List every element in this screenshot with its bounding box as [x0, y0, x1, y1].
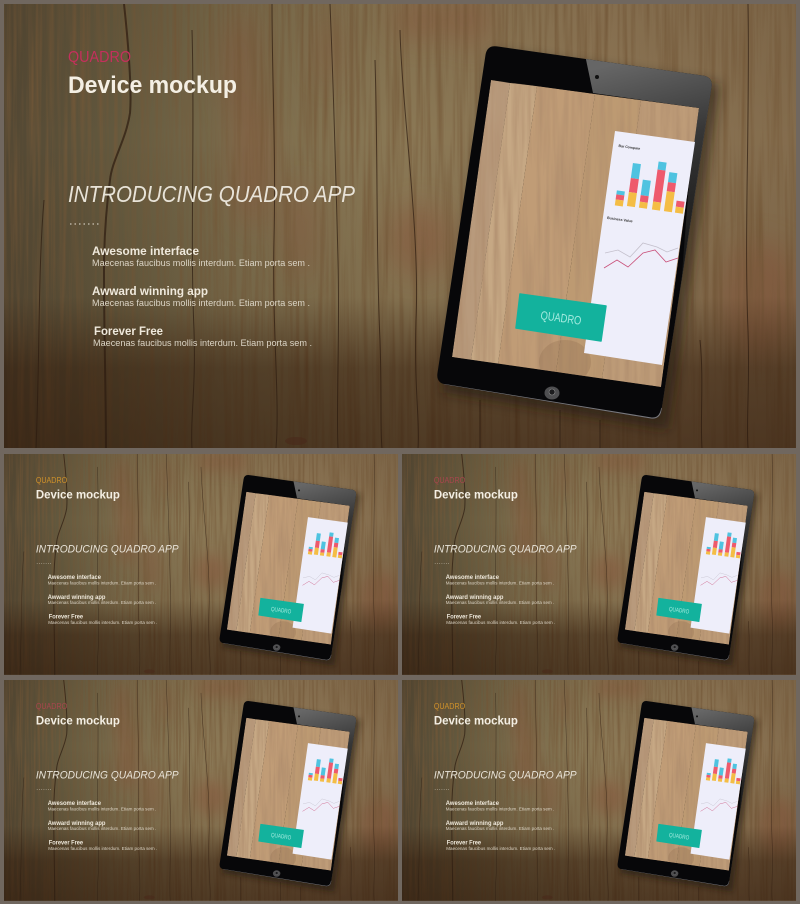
feature list: Maecenas faucibus mollis interdum. Etiam porta sem .: [92, 258, 310, 269]
icon: tablet mockup: [436, 46, 720, 430]
panel: slide variant orange bottom right: [402, 675, 798, 901]
panel: slide variant red bottom left: Awward winning app: [48, 821, 106, 827]
feature list: Awward winning app: [92, 284, 208, 298]
panel: slide variant orange top left: Forever Free: [49, 615, 84, 621]
panel: slide variant orange bottom right: QUADRO: [434, 702, 465, 711]
panel: slide variant red top right: INTRODUCING QUADRO APP: [434, 544, 577, 556]
panel: slide variant orange bottom right: QUADRO: [668, 833, 690, 842]
panel: slide variant red top right: Maecenas faucibus mollis interdum. Etiam porta sem .: [446, 580, 554, 586]
panel: slide variant orange top left: Maecenas faucibus mollis interdum. Etiam porta sem .: [48, 620, 157, 626]
panel: slide variant orange top left: Device mockup: [36, 487, 120, 501]
panel: slide variant red top right: Forever Free: [447, 615, 482, 621]
panel: slide variant orange top left: Awward winning app: [48, 595, 106, 601]
feature list: Maecenas faucibus mollis interdum. Etiam porta sem .: [93, 338, 312, 349]
panel: slide variant orange bottom right: Maecenas faucibus mollis interdum. Etiam porta sem .: [446, 806, 554, 812]
panel: slide variant orange bottom right: Maecenas faucibus mollis interdum. Etiam porta sem .: [446, 826, 554, 832]
panel: slide variant red top right: Awward winning app: [446, 595, 504, 601]
panel: slide variant orange bottom right: INTRODUCING QUADRO APP: [434, 770, 577, 782]
panel: slide variant red top right: QUADRO: [668, 607, 690, 616]
panel: slide variant red top right: QUADRO: [434, 476, 465, 485]
panel: slide variant orange top left: [4, 449, 400, 675]
panel: slide variant red bottom left: Maecenas faucibus mollis interdum. Etiam porta sem .: [48, 826, 156, 832]
panel: slide variant red top right: Maecenas faucibus mollis interdum. Etiam porta sem .: [446, 600, 554, 606]
heading: INTRODUCING QUADRO APP: [68, 181, 356, 207]
panel: slide variant orange bottom right: Maecenas faucibus mollis interdum. Etiam porta sem .: [446, 846, 555, 852]
panel: slide variant orange bottom right: Awward winning app: [446, 821, 504, 827]
panel: slide variant red bottom left: Maecenas faucibus mollis interdum. Etiam porta sem .: [48, 846, 157, 852]
icon: tablet mockup: Bar Compare: [618, 144, 640, 151]
panel: slide variant red top right: Maecenas faucibus mollis interdum. Etiam porta sem .: [446, 620, 555, 626]
feature list: Forever Free: [94, 324, 163, 338]
feature list: Awesome interface: [92, 244, 199, 258]
feature list: [92, 244, 312, 349]
panel: slide variant red bottom left: Awesome interface: [48, 801, 102, 807]
panel: main slide: [4, 0, 800, 448]
panel: slide variant red top right: Awesome interface: [446, 575, 500, 581]
icon: tablet mockup: Business Value: [607, 216, 633, 223]
panel: slide variant red bottom left: Maecenas faucibus mollis interdum. Etiam porta sem .: [48, 806, 156, 812]
panel: slide variant orange bottom right: Forever Free: [447, 841, 482, 847]
panel: slide variant red bottom left: Forever Free: [49, 841, 84, 847]
panel: slide variant orange bottom right: Awesome interface: [446, 801, 500, 807]
panel: slide variant orange top left: Awesome interface: [48, 575, 102, 581]
panel: slide variant red top right: [402, 449, 798, 675]
panel: slide variant red bottom left: QUADRO: [270, 833, 292, 842]
feature list: Maecenas faucibus mollis interdum. Etiam porta sem .: [92, 298, 310, 309]
panel: slide variant red bottom left: QUADRO: [36, 702, 67, 711]
panel: slide variant red bottom left: INTRODUCING QUADRO APP: [36, 770, 179, 782]
panel: slide variant orange top left: QUADRO: [270, 607, 292, 616]
dotted separator: [70, 223, 100, 225]
icon: tablet mockup: QUADRO: [540, 308, 582, 328]
panel: slide variant orange top left: Maecenas faucibus mollis interdum. Etiam porta sem .: [48, 580, 156, 586]
panel: slide variant orange top left: Maecenas faucibus mollis interdum. Etiam porta sem .: [48, 600, 156, 606]
title: Device mockup: [68, 72, 237, 99]
panel: slide variant orange top left: INTRODUCING QUADRO APP: [36, 544, 179, 556]
panel: slide variant red top right: Device mockup: [434, 487, 518, 501]
panel: slide variant orange top left: QUADRO: [36, 476, 67, 485]
panel: slide variant orange bottom right: Device mockup: [434, 713, 518, 727]
panel: slide variant red bottom left: Device mockup: [36, 713, 120, 727]
label: QUADRO: QUADRO: [68, 49, 131, 66]
panel: slide variant red bottom left: [4, 675, 400, 901]
